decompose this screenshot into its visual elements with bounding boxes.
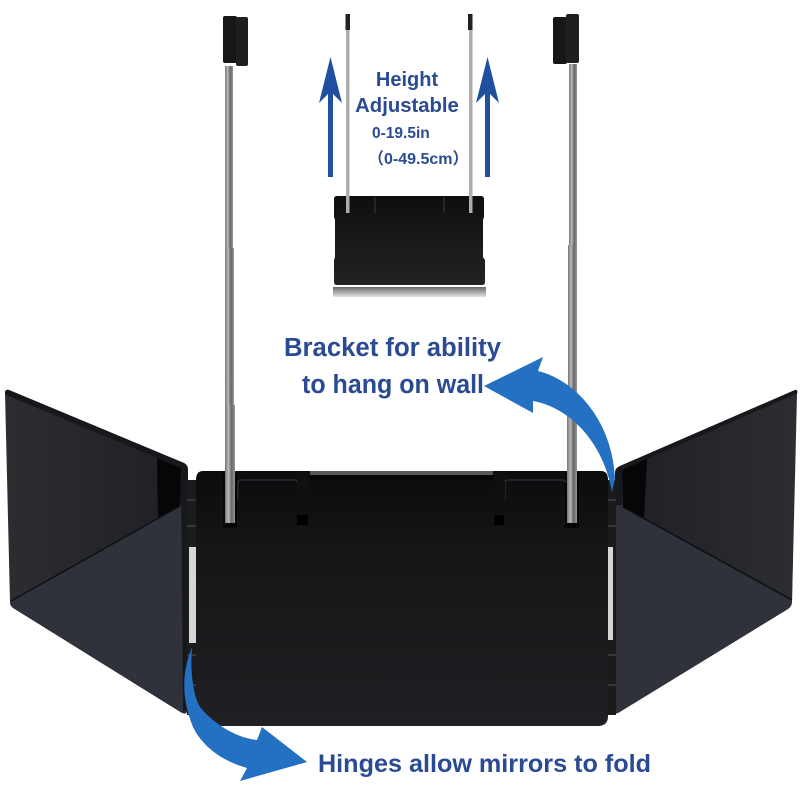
height adjustable label: Height bbox=[376, 69, 438, 91]
small left rod bbox=[346, 14, 350, 213]
right hinge bbox=[606, 480, 616, 715]
height adjustable label: （0-49.5cm） bbox=[368, 150, 468, 168]
bracket label bbox=[284, 334, 502, 399]
small preview mirror bbox=[333, 14, 486, 297]
bracket recess left bbox=[238, 480, 298, 500]
hinges label: Hinges allow mirrors to fold bbox=[318, 750, 651, 778]
arrow: hinges curved bbox=[184, 647, 307, 781]
centre mirror panel bbox=[196, 471, 608, 726]
arrow: height up left bbox=[319, 57, 342, 177]
left mirror wing bbox=[5, 390, 188, 714]
right telescopic rod and bracket bbox=[553, 14, 579, 523]
height adjustable label bbox=[355, 69, 468, 168]
arrow: height up right bbox=[476, 57, 499, 177]
right mirror wing bbox=[613, 390, 797, 714]
left hinge bbox=[187, 480, 197, 715]
bracket label: to hang on wall bbox=[302, 371, 484, 399]
bracket recess right bbox=[505, 480, 566, 500]
arrow: bracket curved bbox=[484, 357, 615, 492]
bracket label: Bracket for ability bbox=[284, 334, 502, 362]
height adjustable label: Adjustable bbox=[355, 95, 459, 117]
rod slot right bbox=[565, 474, 579, 528]
rod slot left bbox=[223, 474, 237, 528]
small right rod bbox=[468, 14, 472, 213]
left telescopic rod and bracket bbox=[223, 16, 248, 523]
height adjustable label: 0-19.5in bbox=[372, 125, 430, 142]
